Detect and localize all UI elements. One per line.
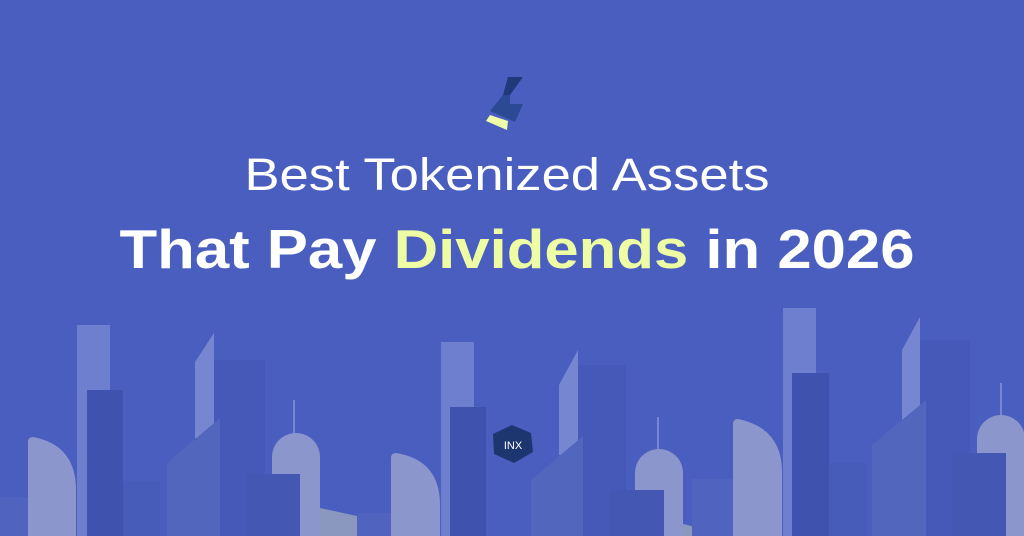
icon: logo — [486, 77, 523, 130]
icon: INX badge — [493, 425, 533, 463]
icon: INX badge: INX — [504, 440, 523, 452]
skyline — [0, 308, 1024, 536]
title line 1: Best Tokenized Assets — [244, 149, 770, 200]
title line 2: That Pay Dividends in 2026 — [120, 218, 914, 280]
